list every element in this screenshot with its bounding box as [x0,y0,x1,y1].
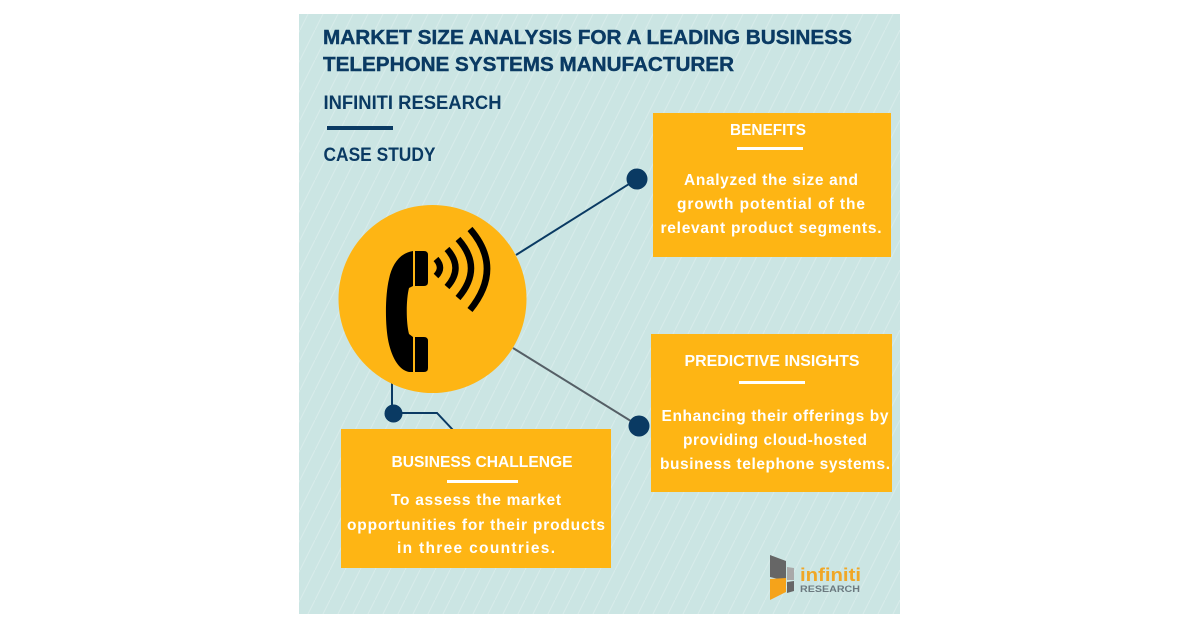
heading: case study: CASE STUDY [324,145,436,166]
divider bar [327,126,393,130]
text: business challenge body [347,492,605,557]
text: business challenge body: in three countries. [397,540,555,557]
panel: predictive insights [651,334,892,492]
text: benefits body: Analyzed the size and [684,172,858,189]
title: MARKET SIZE ANALYSIS FOR A LEADING BUSINESS [323,27,852,49]
connector: predictive insights [513,348,650,436]
text: predictive insights body: business telephone systems. [660,456,890,473]
logo wordmark: infiniti [800,565,861,585]
heading: predictive insights: PREDICTIVE INSIGHTS [684,353,860,370]
panel: background [299,14,900,614]
heading: benefits: BENEFITS [730,122,806,139]
logo: infiniti research [770,555,861,600]
panel: benefits [653,113,891,257]
panel: business challenge [341,429,611,568]
icon: sound waves [436,229,487,310]
title [323,27,852,76]
text: benefits body: relevant product segments. [660,220,882,237]
text: benefits body [660,172,882,237]
text: predictive insights body: providing cloud-hosted [683,432,867,449]
heading: business challenge: BUSINESS CHALLENGE [392,454,573,471]
icon: telephone circle [338,205,526,393]
text: predictive insights body [660,408,890,473]
text: business challenge body: To assess the market [391,492,561,509]
logo: infiniti research: RESEARCH [800,584,860,594]
connector: benefits [516,168,648,255]
icon: logo mark [770,555,794,600]
title: TELEPHONE SYSTEMS MANUFACTURER [323,54,735,76]
text: predictive insights body: Enhancing their offerings by [662,408,889,425]
connector: business challenge [384,380,453,430]
icon: handset [386,251,428,372]
text: business challenge body: opportunities for their products [347,517,605,534]
text: benefits body: growth potential of the [677,196,865,213]
heading: company name: INFINITI RESEARCH [324,93,502,114]
